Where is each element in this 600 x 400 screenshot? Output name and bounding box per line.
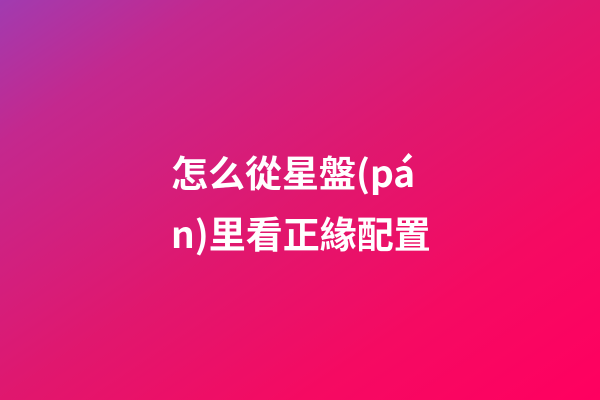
title (171, 144, 431, 259)
title: n)里看正緣配置 (171, 205, 431, 259)
title: 怎么從星盤(pá (171, 144, 415, 198)
